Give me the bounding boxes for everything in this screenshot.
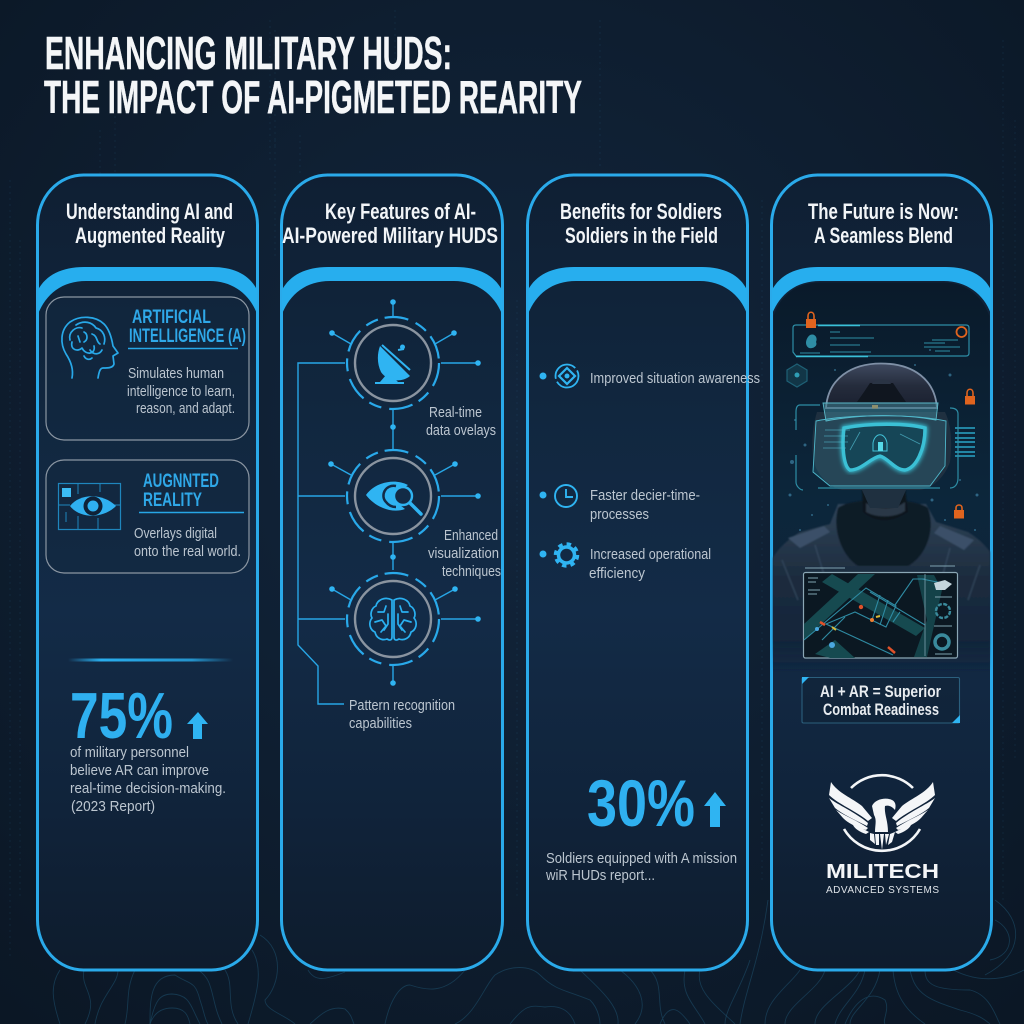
panel frame [282, 175, 502, 970]
dome [826, 364, 937, 408]
card: augmented reality [46, 460, 249, 573]
feature labels: Pattern recognition [349, 697, 455, 714]
goggle lens [843, 424, 925, 470]
benefit: operational efficiency [540, 544, 711, 582]
description: augmented reality [134, 525, 241, 560]
right wing [892, 782, 935, 834]
title: THE IMPACT OF AI-PIGMETED REARITY [44, 71, 582, 123]
stat: 30 percent [545, 766, 737, 884]
heading: augmented reality [139, 471, 244, 512]
benefit: faster decisions [540, 485, 700, 523]
heading [560, 199, 722, 248]
panel: the future is now [772, 175, 992, 970]
panel: key features [282, 175, 502, 970]
description: artificial intelligence: reason, and adapt. [136, 400, 235, 417]
side ears and face [812, 412, 951, 508]
goggle glow [843, 424, 925, 470]
stat: 75 percent: 75% [70, 679, 173, 752]
heading [808, 199, 959, 248]
feature labels: data ovelays [426, 422, 496, 439]
benefit: faster decisions: Faster decier-time- [590, 487, 700, 504]
eagle head and body [872, 799, 896, 832]
heading: Soldiers in the Field [565, 223, 718, 248]
stat: 75 percent: of military personnel [70, 744, 189, 761]
description: artificial intelligence [127, 365, 235, 417]
heading: AI-Powered Military HUDS [282, 223, 498, 248]
heading: artificial intelligence: ARTIFICIAL [132, 307, 211, 328]
callout: AI + AR [802, 677, 960, 723]
description: augmented reality: onto the real world. [134, 543, 241, 560]
header band [282, 267, 502, 314]
header band [38, 267, 257, 314]
hexagon icon [787, 364, 807, 387]
description: artificial intelligence: intelligence to learn, [127, 383, 235, 400]
stat: 30 percent: 30% [587, 766, 695, 840]
visor band [823, 403, 938, 421]
title: ENHANCING MILITARY HUDS: [45, 27, 452, 79]
heading [282, 199, 498, 248]
benefit: faster decisions: processes [590, 506, 649, 523]
heading: augmented reality: REALITY [143, 490, 202, 511]
stat: 75 percent: (2023 Report) [71, 798, 155, 815]
icon: AR eye [58, 484, 121, 530]
heading: Augmented Reality [75, 223, 226, 248]
panel frame [528, 175, 748, 970]
soldier helmet [812, 364, 951, 508]
callout: AI + AR: Combat Readiness [823, 700, 939, 719]
topographic contour lines [53, 900, 1024, 1024]
illustration: soldier with HUD [773, 282, 990, 680]
heading: The Future is Now: [808, 199, 959, 224]
callout: AI + AR: AI + AR = Superior [820, 682, 941, 701]
heading: Key Features of AI- [325, 199, 476, 224]
HUD side bars [955, 428, 975, 456]
icon: brain [347, 573, 439, 665]
heading: augmented reality: AUGNNTED [143, 471, 219, 492]
left wing [829, 782, 872, 834]
card: artificial intelligence [46, 297, 249, 440]
heading: Understanding AI and [66, 199, 233, 224]
warning locks [806, 312, 975, 518]
heading: Benefits for Soldiers [560, 199, 722, 224]
feature labels: techniques [442, 563, 501, 580]
description: augmented reality: Overlays digital [134, 525, 217, 542]
heading: artificial intelligence [128, 307, 246, 348]
benefit: operational efficiency: Increased operational [590, 546, 711, 563]
feature labels: visualization [428, 545, 499, 562]
benefit: situation awareness: Improved situation awareness [590, 370, 760, 387]
feature labels: Real-time [429, 404, 482, 421]
tactical map [804, 566, 958, 658]
icon: AI head [62, 317, 118, 378]
tail feathers [870, 832, 895, 850]
HUD data panel [793, 325, 969, 356]
benefit: situation awareness [540, 364, 760, 388]
heading: artificial intelligence: INTELLIGENCE (A) [129, 326, 246, 347]
HUD frame brackets [796, 405, 958, 490]
soldier body [773, 488, 990, 672]
stat: 75 percent [68, 658, 233, 815]
stat: 75 percent: believe AR can improve [70, 762, 209, 779]
logo: militech eagle: ADVANCED SYSTEMS [826, 885, 939, 896]
heading [66, 199, 233, 248]
heading: A Seamless Blend [814, 223, 953, 248]
emblem ring [844, 775, 920, 851]
logo: militech eagle [826, 775, 939, 896]
stat: 30 percent: Soldiers equipped with A mission [546, 850, 737, 867]
benefit: operational efficiency: efficiency [589, 565, 645, 582]
icon: eye with magnifier [347, 450, 439, 542]
panel: benefits for soldiers [528, 175, 760, 970]
feature labels: Enhanced [444, 527, 498, 544]
feature labels [349, 404, 501, 732]
panel frame [772, 175, 992, 970]
stat: 30 percent: wiR HUDs report... [545, 867, 655, 884]
stat: 75 percent: real-time decision-making. [70, 780, 226, 797]
feature labels: capabilities [349, 715, 412, 732]
header band [528, 267, 747, 314]
icon: satellite dish [347, 317, 439, 409]
header band [772, 267, 991, 314]
description: artificial intelligence: Simulates human [128, 365, 224, 382]
shield glass [813, 416, 946, 486]
wordmark: MILITECH [826, 861, 939, 883]
panel: understanding AI and AR [38, 175, 258, 970]
connector lines [298, 299, 481, 704]
panel frame [38, 175, 258, 970]
title [44, 27, 582, 123]
